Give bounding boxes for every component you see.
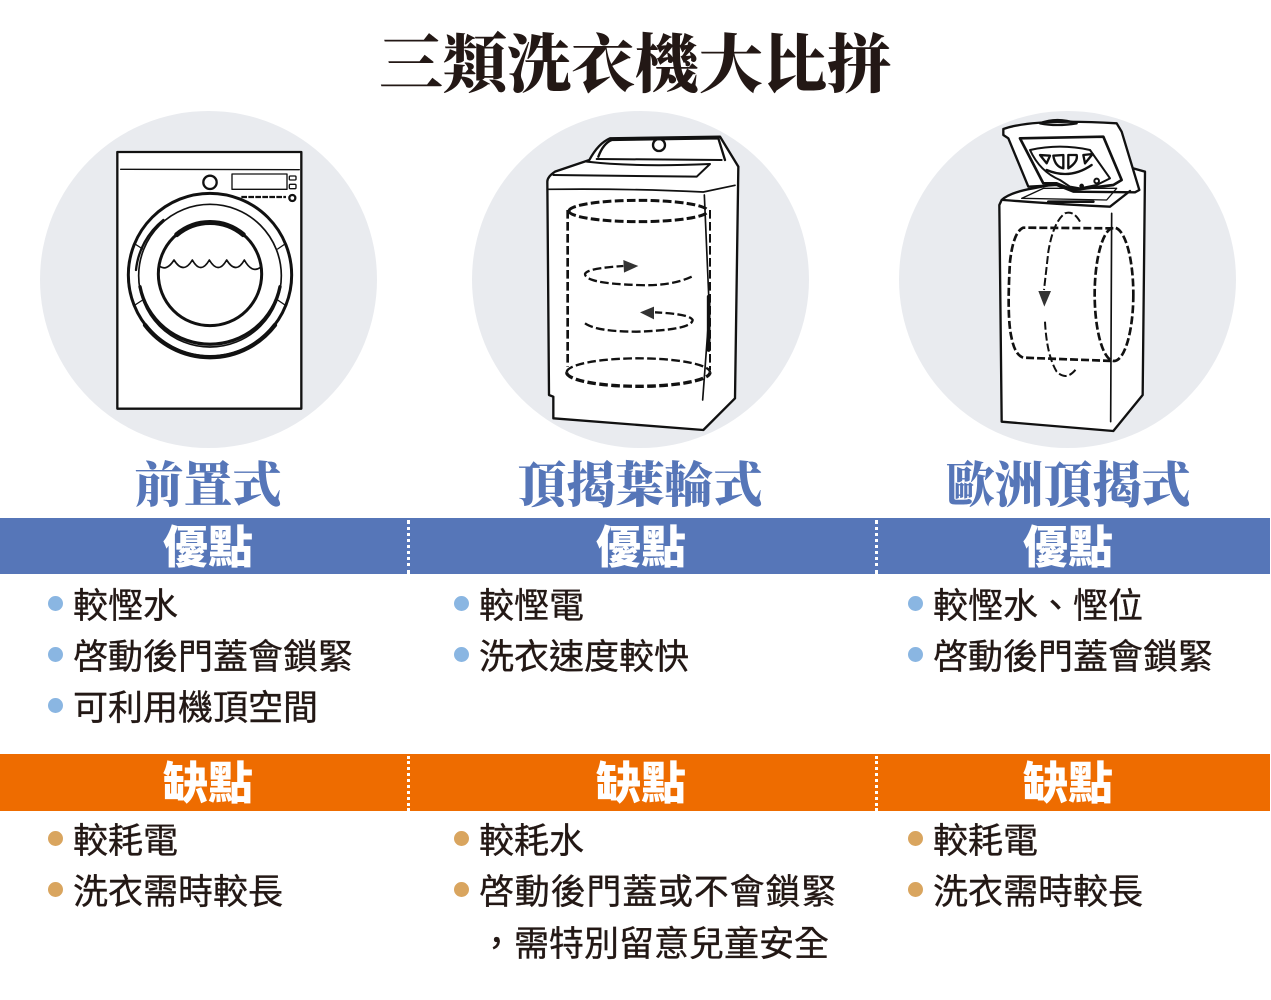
heading: European top-loader: 歐洲頂揭式 [945, 458, 1190, 513]
advantage: saves water and space [908, 587, 1143, 626]
heading: front-loading: 前置式 [134, 458, 282, 513]
panel: top-loading impeller washer: ，需特別留意兒童安全 [479, 925, 829, 964]
advantage: fast wash [454, 638, 689, 677]
panel: European top-loading washer [875, 111, 1270, 912]
panel: front-loading washer: 可利用機頂空間 [73, 689, 318, 728]
advantage: top space [48, 689, 318, 728]
panel: top-loading impeller washer: 較耗水 [479, 822, 584, 861]
panel: European top-loading washer: 較耗電 [933, 822, 1038, 861]
panel: front-loading washer: 洗衣需時較長 [73, 873, 283, 912]
bar: advantages [0, 518, 408, 574]
bar: advantages [876, 518, 1270, 574]
advantage: door locks [908, 638, 1213, 677]
panel: European top-loading washer: 較慳水、慳位 [933, 587, 1143, 626]
disadvantage: uses water [454, 822, 584, 861]
panel: front-loading washer [0, 111, 408, 912]
advantage: saves water [48, 587, 178, 626]
bar: advantages: 優點 [1023, 522, 1113, 573]
illustration: front-loading washer in circle [40, 111, 377, 448]
panel: European top-loading washer: 啓動後門蓋會鎖緊 [933, 638, 1213, 677]
advantage: saves power [454, 587, 584, 626]
disadvantage: uses power [908, 822, 1038, 861]
bar: disadvantages [876, 754, 1270, 811]
bar: disadvantages: 缺點 [163, 758, 253, 809]
bar: advantages: 優點 [596, 522, 686, 573]
panel: front-loading washer: 較耗電 [73, 822, 178, 861]
bar: advantages [408, 518, 876, 574]
advantage: door locks [48, 638, 353, 677]
panel: top-loading impeller washer: 洗衣速度較快 [479, 638, 689, 677]
panel: top-loading impeller washer: 較慳電 [479, 587, 584, 626]
bar: disadvantages: 缺點 [1023, 758, 1113, 809]
panel: front-loading washer: 啓動後門蓋會鎖緊 [73, 638, 353, 677]
title: 三類洗衣機大比拼 [379, 30, 891, 101]
bar: advantages: 優點 [163, 522, 253, 573]
bar: disadvantages [408, 754, 876, 811]
disadvantage: long wash time [48, 873, 283, 912]
panel: top-loading impeller washer [407, 111, 876, 964]
disadvantage: uses power [48, 822, 178, 861]
illustration: European top-loader in circle [899, 111, 1236, 448]
panel: front-loading washer: 較慳水 [73, 587, 178, 626]
panel: European top-loading washer: 洗衣需時較長 [933, 873, 1143, 912]
heading: top-loading impeller: 頂揭葉輪式 [517, 458, 762, 513]
illustration: impeller washer in circle [472, 111, 809, 448]
bar: disadvantages: 缺點 [596, 758, 686, 809]
bar: disadvantages [0, 754, 408, 811]
panel: top-loading impeller washer: 啓動後門蓋或不會鎖緊 [479, 873, 837, 912]
disadvantage: door may not lock [454, 873, 837, 912]
disadvantage: long wash time [908, 873, 1143, 912]
